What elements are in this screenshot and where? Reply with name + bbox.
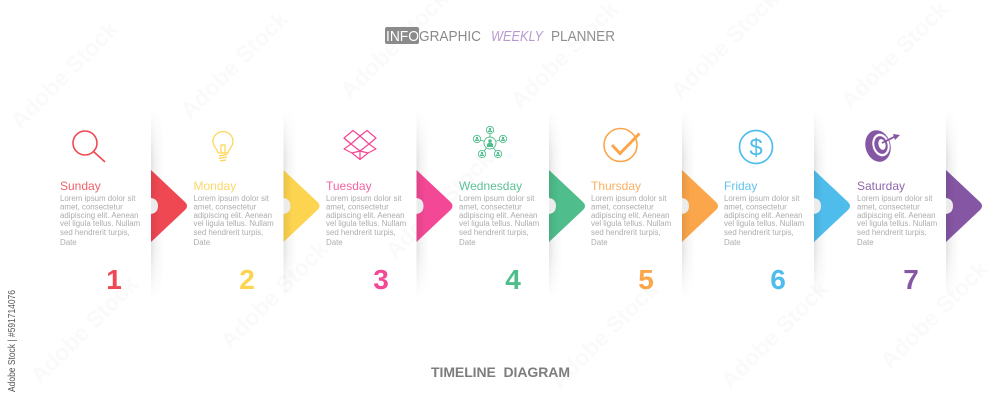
icon: open box [344,130,376,160]
text block: Lorem ipsum dolor sit [60,194,136,203]
text block: amet, consectetur [60,202,123,212]
heading: Tuesday: Tuesday [326,179,372,193]
icon: check circle [604,128,640,162]
icon: target with dart [862,127,900,165]
watermark: Adobe Stock [215,236,333,354]
panel: Sunday [60,125,187,289]
stock credit: Adobe Stock | #591714076 [6,290,18,392]
number 7: 7 [903,264,919,295]
heading: Saturday: Saturday [857,179,905,193]
text block: adipiscing elit. Aenean [60,211,139,220]
text block: vel ligula tellus. Nullam [326,219,407,228]
watermark: Adobe Stock [715,276,833,394]
text block: vel ligula tellus. Nullam [591,219,672,228]
text block: vel ligula tellus. Nullam [194,219,274,228]
text block: Lorem ipsum dolor sit [724,194,800,203]
number 4: 4 [505,264,521,295]
text block: Date [326,238,343,247]
watermark: Adobe Stock [545,276,663,394]
arrow: Monday [284,170,320,242]
text block: sed hendrerit turpis, [857,228,927,237]
arrow: Friday [814,170,850,242]
text block: sed hendrerit turpis, [459,228,529,237]
title: INFO [386,28,419,45]
watermark: Adobe Stock [25,271,143,389]
text block: vel ligula tellus. Nullam [60,219,141,228]
arrow: Thursday [682,170,718,242]
arrow: Tuesday [416,170,452,242]
text block: amet, consectetur [194,202,257,212]
text block: Date [459,238,476,247]
text block: sed hendrerit turpis, [60,228,130,237]
icon: dollar circle: $ [749,134,763,162]
watermark: Adobe Stock [175,6,293,124]
title: WEEKLY [491,28,544,45]
text block: Date [194,238,211,247]
title: GRAPHIC [419,28,481,45]
title: PLANNER [551,28,615,45]
icon: dollar circle [740,130,772,164]
text block: sed hendrerit turpis, [724,228,794,237]
icon: light bulb [213,132,233,161]
text block: amet, consectetur [459,202,522,212]
text block: amet, consectetur [724,202,787,212]
heading: Sunday: Sunday [60,179,101,193]
arrow: Sunday [151,170,187,242]
text block: Lorem ipsum dolor sit [459,194,535,203]
number 6: 6 [770,264,786,295]
panel: Tuesday [326,125,452,290]
text block: Date [857,238,874,247]
arrow: Wednesday [549,170,585,242]
text block: Lorem ipsum dolor sit [194,194,270,203]
number 2: 2 [239,264,255,295]
text block: vel ligula tellus. Nullam [724,219,805,228]
text block: sed hendrerit turpis, [326,228,396,237]
icon: magnifier [73,131,104,162]
panel: Saturday [857,125,982,289]
panel: Monday [194,125,320,289]
text block: sed hendrerit turpis, [194,228,263,237]
text block: adipiscing elit. Aenean [724,211,803,220]
heading: Thursday: Thursday [591,179,641,193]
watermark: Adobe Stock [875,256,993,374]
text block: adipiscing elit. Aenean [194,211,272,220]
icon: people network [473,126,507,158]
panel: Friday [724,125,850,290]
number 1: 1 [106,264,122,295]
text block: Lorem ipsum dolor sit [857,194,933,203]
text block: Date [724,238,741,247]
number 3: 3 [373,264,389,295]
title [385,27,615,45]
text block: amet, consectetur [326,202,389,212]
text block: adipiscing elit. Aenean [591,211,670,220]
text block: Date [591,238,608,247]
text block: sed hendrerit turpis, [591,228,661,237]
text block: adipiscing elit. Aenean [857,211,936,220]
text block: Lorem ipsum dolor sit [326,194,402,203]
watermark: Adobe Stock [380,146,498,264]
number 5: 5 [638,264,654,295]
text block: vel ligula tellus. Nullam [459,219,540,228]
panel: Wednesday [459,125,585,289]
heading: Friday: Friday [724,179,757,193]
text block: Lorem ipsum dolor sit [591,194,667,203]
text block: adipiscing elit. Aenean [326,211,405,220]
watermark: Adobe Stock [5,16,123,134]
panel: Thursday [591,125,718,290]
text block: Date [60,238,77,247]
arrow: Saturday [946,170,982,242]
text block: amet, consectetur [591,202,654,212]
heading: Wednesday: Wednesday [459,179,522,193]
text block: adipiscing elit. Aenean [459,211,538,220]
heading: Monday: Monday [194,179,236,193]
footer title: TIMELINE DIAGRAM [431,364,570,380]
text block: amet, consectetur [857,202,920,212]
text block: vel ligula tellus. Nullam [857,219,938,228]
